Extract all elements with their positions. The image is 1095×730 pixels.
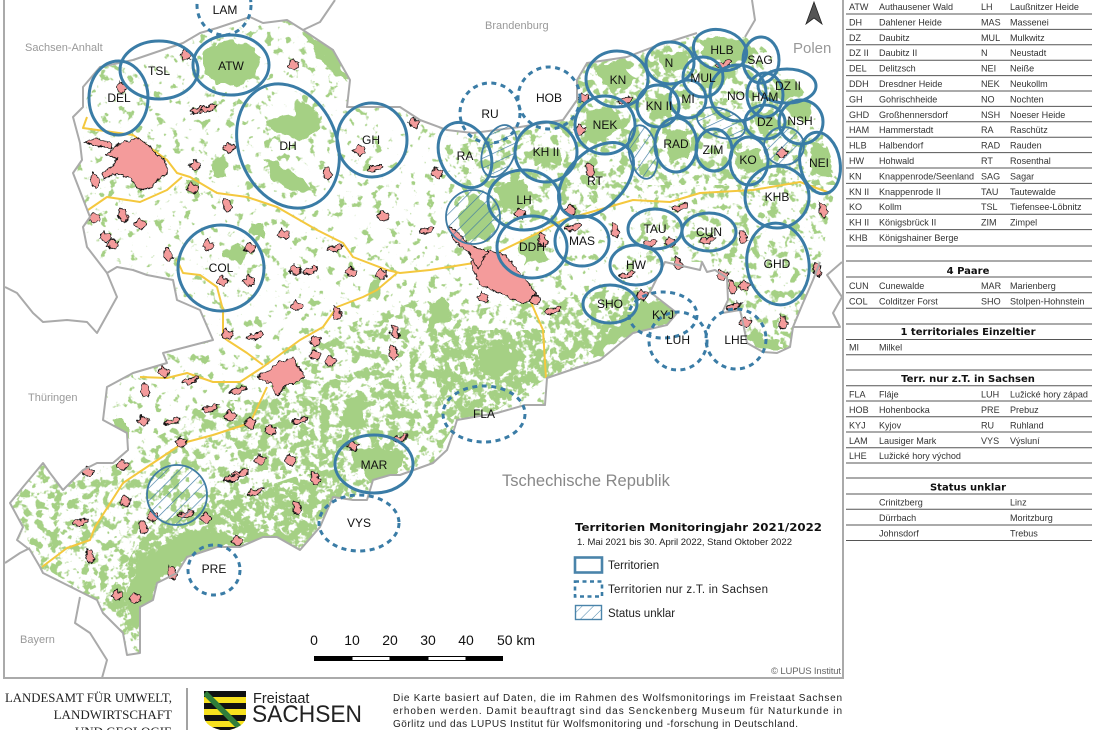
table: 4 Paare: Stolpen-Hohnstein — [1010, 296, 1084, 306]
table: Rudel: Mulkwitz — [1010, 33, 1045, 43]
table: Rudel: NSH — [981, 110, 1000, 120]
table: 4 Paare: CUN — [849, 281, 869, 291]
table: Rudel: TSL — [981, 202, 998, 212]
table: Rudel: Königshainer Berge — [879, 233, 958, 243]
table: Terr. nur z.T. in Sachsen: Výsluní — [1010, 436, 1040, 446]
scale bar: 0 — [310, 632, 318, 648]
territory labels: DZ — [757, 115, 773, 129]
legend: Territorien — [608, 560, 659, 572]
table: Rudel: KN II — [849, 187, 869, 197]
table: Status unklar — [846, 478, 1092, 540]
table: Rudel: Daubitz — [879, 33, 910, 43]
legend: Territorien nur z.T. in Sachsen — [608, 584, 768, 596]
territory labels: HAM — [752, 90, 778, 104]
country labels: Tschechische Republik — [502, 472, 671, 490]
table: Status unklar: Crinitzberg — [879, 498, 923, 508]
country labels: Thüringen — [28, 392, 78, 404]
scale bar: 10 — [344, 632, 360, 648]
icon: north arrow — [806, 2, 822, 24]
table: Terr. nur z.T. in Sachsen: Hohenbocka — [879, 405, 931, 415]
table: Rudel: SAG — [981, 171, 1000, 181]
table: 4 Paare: SHO — [981, 296, 1001, 306]
scale bar — [310, 632, 535, 661]
table: Status unklar: Status unklar — [930, 482, 1006, 494]
territory labels: ATW — [218, 59, 245, 73]
table: Rudel: Delitzsch — [879, 64, 916, 74]
territory labels: DEL — [107, 91, 131, 105]
territory labels: KYJ — [652, 308, 674, 322]
table: 4 Paare — [846, 261, 1092, 308]
logo text — [252, 691, 362, 728]
table: Rudel: KH II — [849, 218, 869, 228]
territory labels: FLA — [473, 407, 495, 421]
territories: packs and pairs — [89, 24, 845, 493]
table: Rudel: Zimpel — [1010, 218, 1037, 228]
table: Rudel: KN — [849, 171, 862, 181]
table: Terr. nur z.T. in Sachsen: Prebuz — [1010, 405, 1039, 415]
table: Terr. nur z.T. in Sachsen: LAM — [849, 436, 868, 446]
territory labels: ZIM — [703, 143, 723, 157]
logo text: SACHSEN — [252, 701, 362, 728]
table: Rudel: Neustadt — [1010, 48, 1047, 58]
table: Rudel: Großhennersdorf — [879, 110, 948, 120]
table: Rudel: Hohwald — [879, 156, 914, 166]
territory labels: NEI — [809, 156, 829, 170]
table: Rudel: GH — [849, 94, 863, 104]
table: Rudel: DEL — [849, 64, 867, 74]
territory labels: DZ II — [775, 79, 801, 93]
table: Terr. nur z.T. in Sachsen: Terr. nur z.T. in Sachsen — [901, 374, 1035, 385]
territory labels: RAD — [663, 137, 689, 151]
table: Rudel: DZ II — [849, 48, 869, 58]
divider — [186, 688, 188, 730]
table: Rudel: NO — [981, 94, 995, 104]
table: Rudel: HAM — [849, 125, 869, 135]
scale bar: 20 — [382, 632, 398, 648]
table: Rudel: ZIM — [981, 218, 997, 228]
forest areas — [0, 0, 845, 680]
footer note: erhoben werden. Damit beauftragt sind das Senckenberg Museum für Naturkunde in — [393, 706, 842, 717]
table: Rudel: NEI — [981, 64, 996, 74]
table: Terr. nur z.T. in Sachsen: LHE — [849, 451, 867, 461]
table: 4 Paare: 4 Paare — [947, 266, 990, 277]
table: Rudel: Nochten — [1010, 94, 1044, 104]
table: Rudel: Halbendorf — [879, 141, 924, 151]
table: Terr. nur z.T. in Sachsen: Fláje — [879, 390, 899, 400]
territory labels: N — [665, 56, 673, 70]
footer: agency name: LANDESAMT FÜR UMWELT, — [5, 690, 172, 705]
table: Rudel: Neukollm — [1010, 79, 1048, 89]
table: Terr. nur z.T. in Sachsen: KYJ — [849, 420, 866, 430]
table: Rudel: LH — [981, 2, 993, 12]
legend: 1. Mai 2021 bis 30. April 2022, Stand Oktober 2022 — [577, 537, 792, 548]
panel: map — [0, 0, 845, 680]
table: Rudel: KHB — [849, 233, 868, 243]
table: Terr. nur z.T. in Sachsen: PRE — [981, 405, 1000, 415]
credit: © LUPUS Institut — [771, 666, 841, 677]
table: Rudel: Tautewalde — [1010, 187, 1056, 197]
table: Terr. nur z.T. in Sachsen: Kyjov — [879, 420, 902, 430]
table: Rudel: MUL — [981, 33, 1000, 43]
footer note — [393, 693, 842, 730]
table: Rudel — [846, 2, 1092, 246]
icon: Saxony coat of arms — [204, 691, 246, 730]
territory labels: HLB — [710, 43, 734, 57]
territory labels: DH — [279, 139, 297, 153]
table: Rudel: Knappenrode II — [879, 187, 941, 197]
table: Rudel: DZ — [849, 33, 862, 43]
footer: agency name — [5, 690, 172, 730]
legend — [575, 521, 822, 620]
territory labels: VYS — [347, 516, 371, 530]
table: Rudel: Königsbrück II — [879, 218, 936, 228]
table: Terr. nur z.T. in Sachsen — [846, 370, 1092, 463]
territory labels: KN — [610, 73, 626, 87]
territory labels: NSH — [787, 114, 813, 128]
table: Terr. nur z.T. in Sachsen: VYS — [981, 436, 999, 446]
table: 4 Paare: Marienberg — [1010, 281, 1056, 291]
table: Status unklar: Johnsdorf — [879, 528, 919, 538]
table: Terr. nur z.T. in Sachsen: Lužické hory východ — [879, 451, 961, 461]
footer: agency name: LANDWIRTSCHAFT — [54, 707, 172, 722]
territory labels: LHE — [724, 333, 748, 347]
scale bar: 40 — [458, 632, 474, 648]
territory labels: KO — [739, 153, 757, 167]
table: Terr. nur z.T. in Sachsen: HOB — [849, 405, 869, 415]
cities — [72, 49, 828, 603]
logo text: Freistaat — [253, 691, 309, 707]
footer note: Die Karte basiert auf Daten, die im Rahmen des Wolfsmonitorings im Freistaat Sachsen — [393, 693, 842, 704]
table: Rudel: NEK — [981, 79, 1000, 89]
territory labels: LUH — [666, 333, 690, 347]
table: Rudel: Sagar — [1010, 171, 1034, 181]
table: 4 Paare: COL — [849, 296, 868, 306]
table: Status unklar: Trebus — [1010, 528, 1038, 538]
table: Terr. nur z.T. in Sachsen: RU — [981, 420, 994, 430]
territory labels: HOB — [536, 91, 562, 105]
table: Rudel: DDH — [849, 79, 869, 89]
table: 1 territoriales Einzeltier: MI — [849, 342, 859, 352]
table: Rudel: Raschütz — [1010, 125, 1048, 135]
territory labels: MAR — [361, 458, 388, 472]
table: Terr. nur z.T. in Sachsen: LUH — [981, 390, 999, 400]
territory labels: HW — [626, 258, 647, 272]
territory labels: SAG — [747, 53, 773, 67]
table: Status unklar: Moritzburg — [1010, 513, 1053, 523]
table: Terr. nur z.T. in Sachsen: FLA — [849, 390, 867, 400]
territory labels: KH II — [533, 145, 559, 159]
motorways — [42, 117, 830, 567]
table: 4 Paare: Colditzer Forst — [879, 296, 938, 306]
legend: Territorien Monitoringjahr 2021/2022 — [575, 521, 822, 534]
table: Terr. nur z.T. in Sachsen: Ruhland — [1010, 420, 1044, 430]
table: Rudel: N — [981, 48, 988, 58]
footer note: Görlitz und das LUPUS Institut für Wolfsmonitoring und -forschung in Deutschland. — [393, 719, 798, 730]
state borders — [5, 0, 842, 678]
country labels: Sachsen-Anhalt — [25, 42, 103, 54]
table: Rudel: Laußnitzer Heide — [1010, 2, 1079, 12]
table: Rudel: KO — [849, 202, 862, 212]
scale bar: 50 km — [497, 632, 535, 648]
table: Rudel: Gohrischheide — [879, 94, 937, 104]
table: Rudel: Dahlener Heide — [879, 17, 942, 27]
territory labels: TAU — [643, 222, 667, 236]
legend: Status unklar — [608, 608, 675, 620]
table: Rudel: Daubitz II — [879, 48, 917, 58]
territory labels: RA — [457, 149, 473, 163]
table: Rudel: TAU — [981, 187, 998, 197]
territory labels: KN II — [646, 99, 672, 113]
territory labels: MAS — [569, 234, 595, 248]
territory labels: NO — [727, 89, 745, 103]
territory labels: COL — [209, 261, 234, 275]
scale bar: 30 — [420, 632, 436, 648]
table: Rudel: HLB — [849, 141, 867, 151]
table: Rudel: Neiße — [1010, 64, 1034, 74]
territory labels: RT — [587, 174, 604, 188]
country labels: Bayern — [20, 634, 55, 646]
table: Status unklar: Linz — [1010, 498, 1027, 508]
table: Rudel: Rauden — [1010, 141, 1042, 151]
table: Rudel: Authausener Wald — [879, 2, 953, 12]
table: Rudel: Noeser Heide — [1010, 110, 1065, 120]
panel: territory table — [846, 2, 1092, 540]
territory labels: KHB — [765, 190, 789, 204]
table: Rudel: Massenei — [1010, 17, 1049, 27]
territory labels: NEK — [593, 118, 617, 132]
table: Rudel: DH — [849, 17, 862, 27]
table: 4 Paare: MAR — [981, 281, 1002, 291]
territory labels: CUN — [696, 225, 722, 239]
territories: only partly in Saxony — [188, 0, 766, 595]
country labels: Brandenburg — [485, 20, 549, 32]
table: Status unklar: Dürrbach — [879, 513, 916, 523]
country labels — [20, 20, 831, 646]
territory labels: PRE — [202, 562, 226, 576]
table: 4 Paare: Cunewalde — [879, 281, 924, 291]
table: Rudel: Hammerstadt — [879, 125, 934, 135]
table: Rudel: Dresdner Heide — [879, 79, 942, 89]
table: 1 territoriales Einzeltier: 1 territoriales Einzeltier — [900, 327, 1036, 338]
map frame — [4, 0, 843, 678]
territory labels: SHO — [597, 297, 623, 311]
country labels: Polen — [793, 40, 831, 57]
territory labels: GH — [362, 133, 380, 147]
territory labels: MUL — [690, 71, 716, 85]
table: 1 territoriales Einzeltier — [846, 324, 1092, 355]
table: Rudel: Tiefensee-Löbnitz — [1010, 202, 1082, 212]
territory labels: LAM — [213, 3, 237, 17]
table: Terr. nur z.T. in Sachsen: Lužické hory západ — [1010, 390, 1088, 400]
territory labels: RU — [481, 107, 499, 121]
table: Rudel: Rosenthal — [1010, 156, 1051, 166]
territory labels: LH — [516, 193, 532, 207]
table: Rudel: HW — [849, 156, 865, 166]
table: Rudel: GHD — [849, 110, 870, 120]
territory labels: MI — [681, 92, 695, 106]
table: Terr. nur z.T. in Sachsen: Lausiger Mark — [879, 436, 937, 446]
table: Rudel: RAD — [981, 141, 1001, 151]
territories: status unklar — [147, 101, 804, 525]
table: Rudel: Knappenrode/Seenland — [879, 171, 974, 181]
table: Rudel: RT — [981, 156, 993, 166]
territory labels: GHD — [764, 257, 791, 271]
table: Rudel: MAS — [981, 17, 1001, 27]
table: Rudel: RA — [981, 125, 995, 135]
table: Rudel: ATW — [849, 2, 869, 12]
territory labels: TSL — [148, 64, 170, 78]
table: 1 territoriales Einzeltier: Milkel — [879, 342, 902, 352]
table: Rudel: Kollm — [879, 202, 902, 212]
territory labels: DDH — [519, 240, 545, 254]
territory labels — [107, 3, 829, 576]
